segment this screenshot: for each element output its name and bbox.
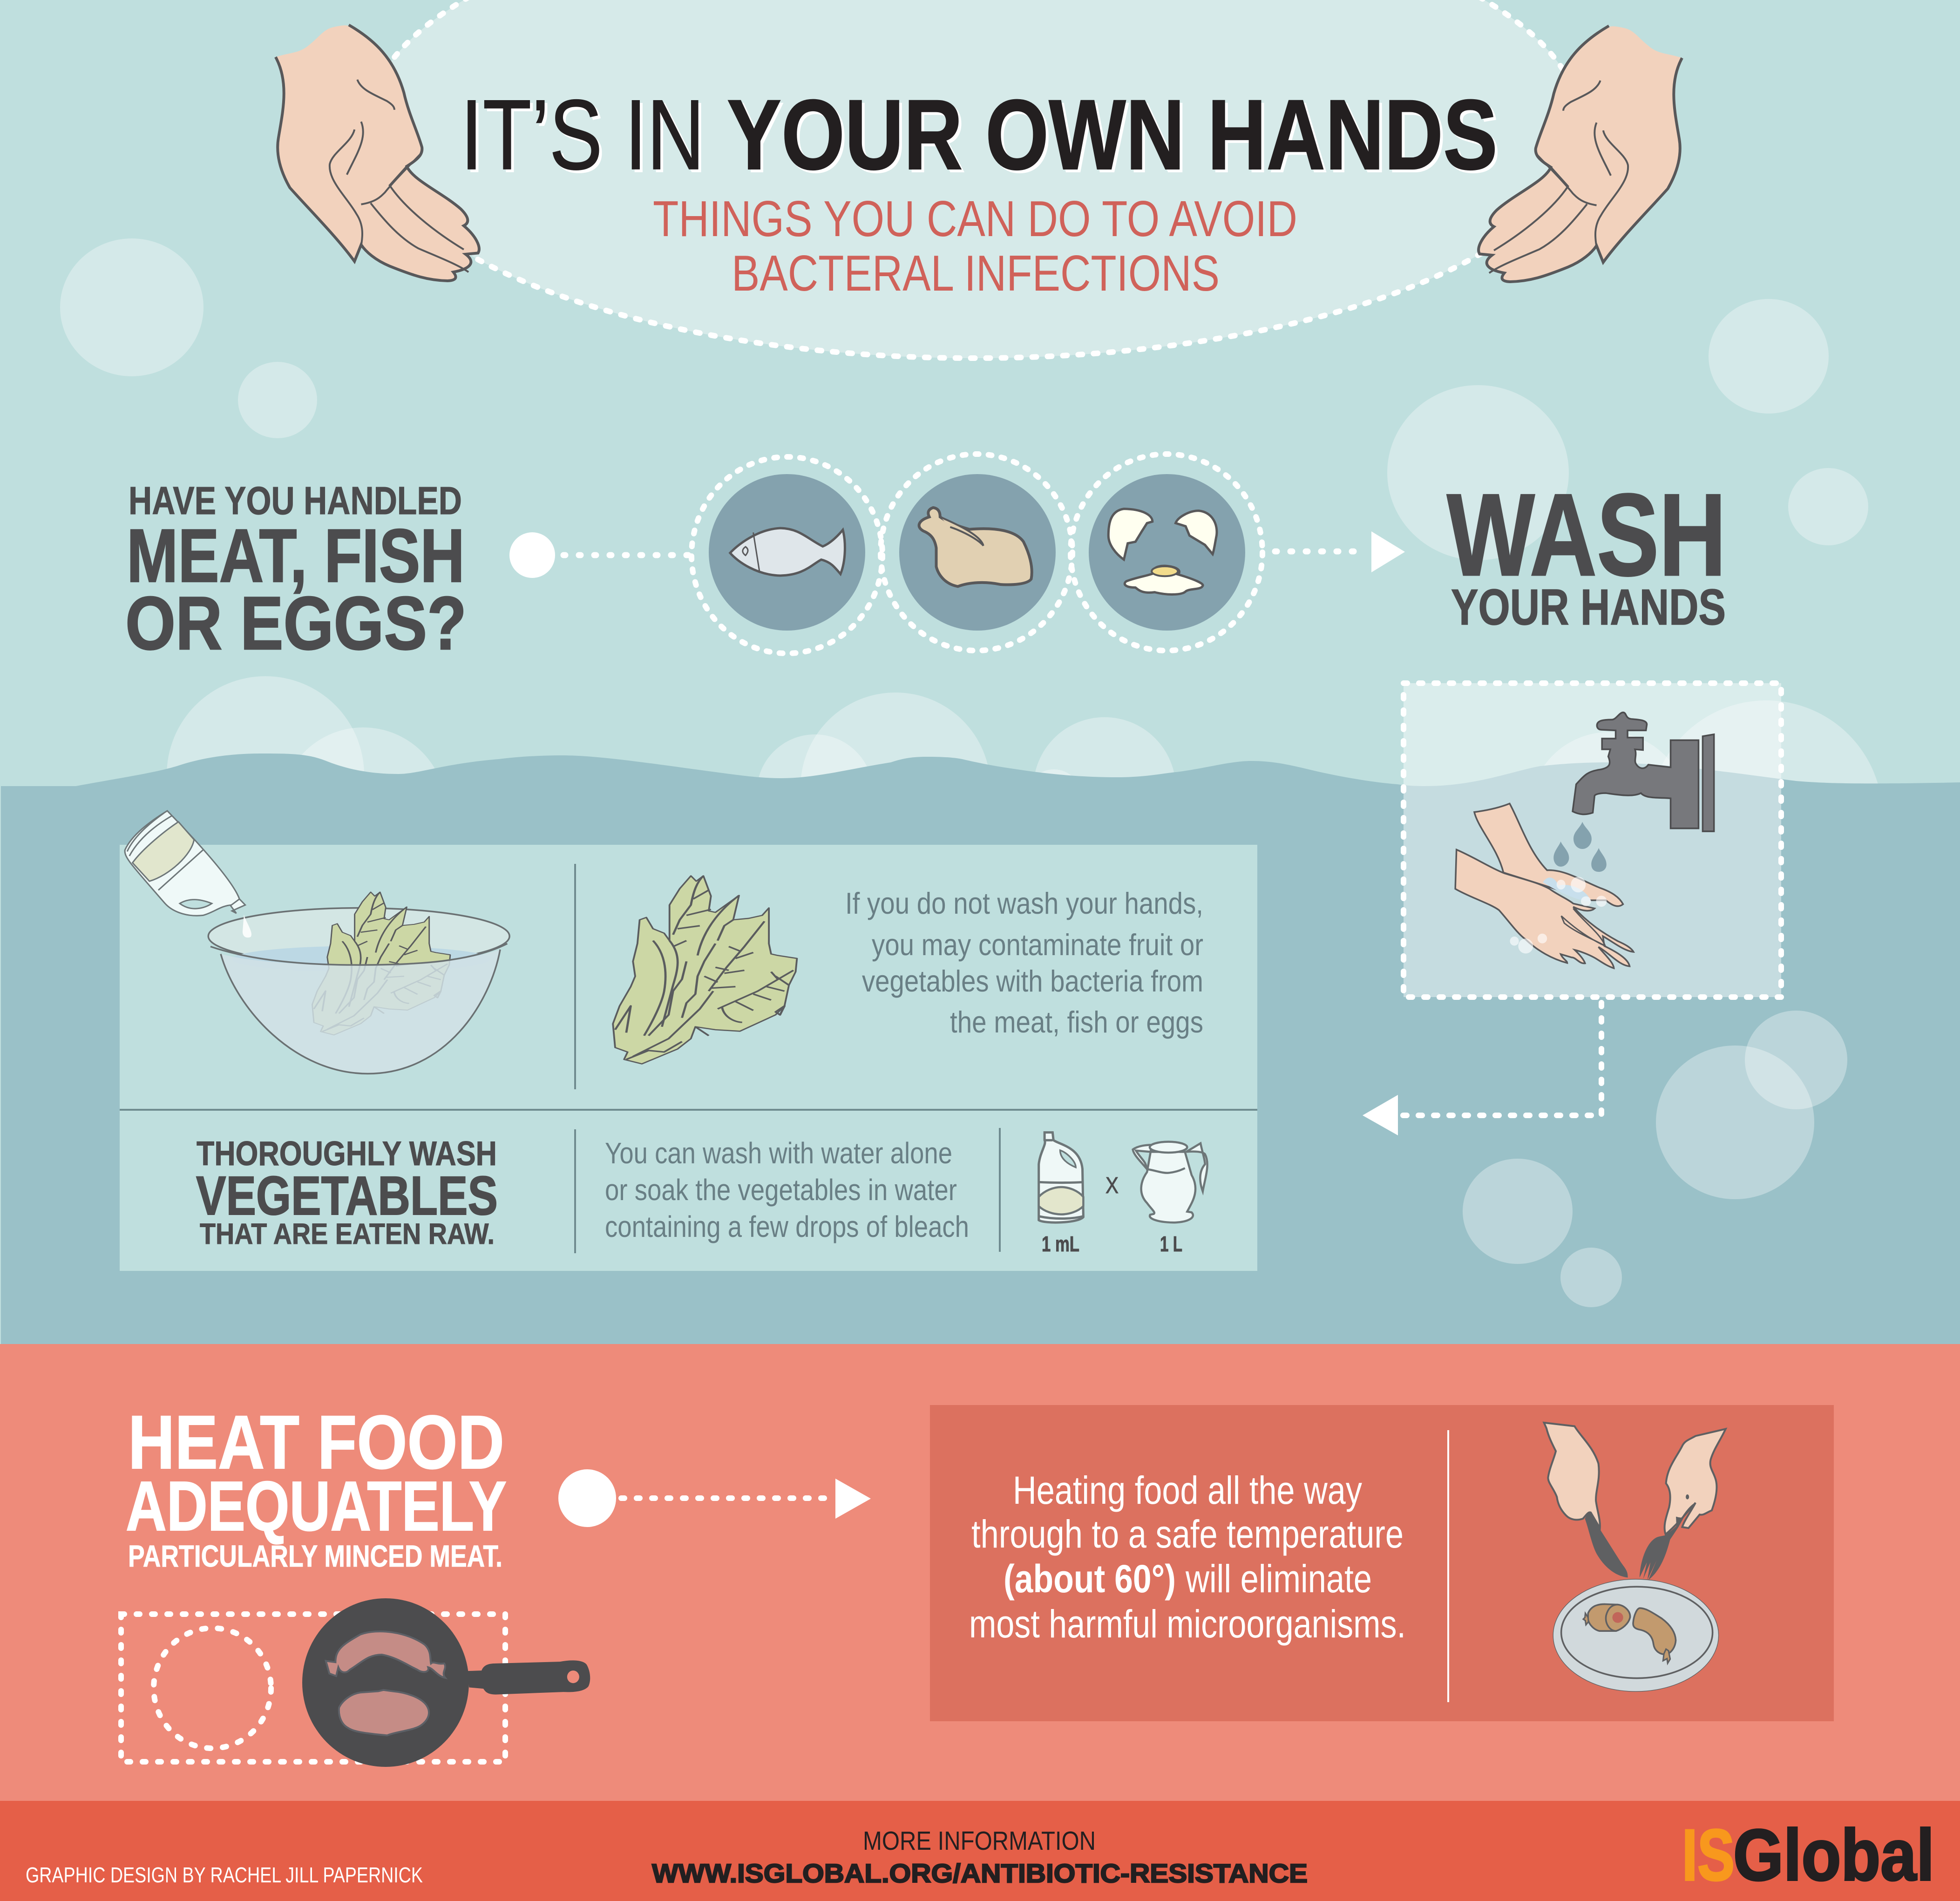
icon: faucet and hands	[1455, 713, 1714, 968]
food circles	[692, 454, 1262, 653]
heading: heat food adequately: ADEQUATELY	[126, 1466, 507, 1545]
water background with wave	[1, 754, 1960, 1346]
logo: Global	[1733, 1815, 1934, 1896]
heading: have you handled meat, fish or eggs	[125, 479, 467, 665]
circle: fish	[692, 457, 882, 653]
heading: heat food adequately: HEAT FOOD	[128, 1399, 504, 1485]
text: contamination warning: you may contaminate fruit or	[872, 928, 1203, 962]
header ellipse	[367, 0, 1581, 358]
heading: thoroughly wash vegetables: THOROUGHLY WASH	[197, 1135, 497, 1173]
panel: hand washing	[1404, 683, 1781, 997]
text: heating explanation: most harmful microorganisms.	[969, 1602, 1406, 1646]
title: IT’S IN	[461, 79, 705, 190]
arrow from wash to vegetables	[1363, 1003, 1601, 1135]
text: contamination warning	[845, 886, 1203, 1039]
heading: have you handled meat, fish or eggs: HAVE YOU HANDLED	[129, 479, 462, 523]
heading: heat food adequately: PARTICULARLY MINCED MEAT.	[128, 1539, 502, 1573]
heading: wash your hands	[1447, 470, 1726, 636]
icon: right hand	[1478, 26, 1682, 282]
more information	[652, 1826, 1308, 1888]
section: heat background	[0, 1344, 1960, 1801]
panel: heating explanation	[930, 1405, 1834, 1721]
text: heating explanation: through to a safe temperature	[971, 1512, 1404, 1556]
text: wash instructions: You can wash with water alone	[605, 1136, 952, 1170]
text: wash instructions	[605, 1136, 969, 1243]
heading: thoroughly wash vegetables: VEGETABLES	[196, 1165, 498, 1227]
icon: lettuce	[613, 876, 797, 1064]
title	[461, 79, 1498, 190]
icon: bowl with bleach	[125, 811, 509, 1074]
icon: hands with knife and fork over plate	[1544, 1423, 1726, 1691]
circle: eggs	[1071, 454, 1262, 651]
heading: thoroughly wash vegetables: THAT ARE EATEN RAW.	[200, 1218, 495, 1250]
text: heating explanation: Heating food all the way	[1013, 1468, 1362, 1512]
heading: have you handled meat, fish or eggs: MEAT, FISH	[127, 514, 465, 598]
text: contamination warning: the meat, fish or eggs	[950, 1005, 1203, 1039]
heading: heat food adequately	[126, 1399, 507, 1573]
text: heating explanation	[969, 1468, 1406, 1646]
logo: IS	[1682, 1815, 1735, 1896]
start dot and arrow	[558, 1469, 871, 1527]
icon: bleach bottle	[1039, 1133, 1083, 1222]
background bubbles upper	[60, 238, 1883, 933]
text: heating explanation: (about 60°)	[1004, 1557, 1176, 1601]
measure labels: 1 L	[1160, 1232, 1182, 1256]
text: contamination warning: If you do not wash your hands,	[845, 886, 1203, 920]
text: wash instructions: or soak the vegetables in water	[605, 1173, 957, 1207]
heading: thoroughly wash vegetables	[196, 1135, 498, 1250]
arrow to wash	[1275, 531, 1405, 572]
footer bar	[0, 1801, 1960, 1901]
text: contamination warning: vegetables with bacteria from	[862, 964, 1203, 998]
title: YOUR OWN HANDS	[727, 79, 1498, 190]
subtitle: BACTERAL INFECTIONS	[732, 245, 1220, 302]
subtitle: THINGS YOU CAN DO TO AVOID	[653, 190, 1297, 247]
subtitle	[653, 190, 1297, 302]
icon: frying pan with sausages	[302, 1598, 590, 1767]
panel: vegetables	[120, 811, 1257, 1271]
heading: wash your hands: YOUR HANDS	[1451, 579, 1726, 636]
heading: have you handled meat, fish or eggs: OR EGGS?	[125, 581, 467, 665]
more information: WWW.ISGLOBAL.ORG/ANTIBIOTIC-RESISTANCE	[652, 1859, 1308, 1888]
credit: GRAPHIC DESIGN BY RACHEL JILL PAPERNICK	[26, 1863, 423, 1887]
circle: chicken	[881, 454, 1072, 651]
measure labels: 1 mL	[1042, 1232, 1079, 1256]
icon: water jug	[1133, 1142, 1207, 1222]
start dot and dotted connector	[509, 532, 689, 578]
text: heating explanation: will eliminate	[1185, 1557, 1372, 1601]
text: wash instructions: containing a few drops of bleach	[605, 1210, 969, 1243]
water bubbles	[1463, 1011, 1847, 1307]
icon: left hand	[276, 25, 479, 281]
multiply sign: X	[1105, 1173, 1119, 1198]
heading: wash your hands: WASH	[1447, 470, 1726, 600]
icon: stove burner	[121, 1614, 505, 1762]
more information: MORE INFORMATION	[863, 1826, 1096, 1856]
measure labels	[1042, 1232, 1182, 1256]
